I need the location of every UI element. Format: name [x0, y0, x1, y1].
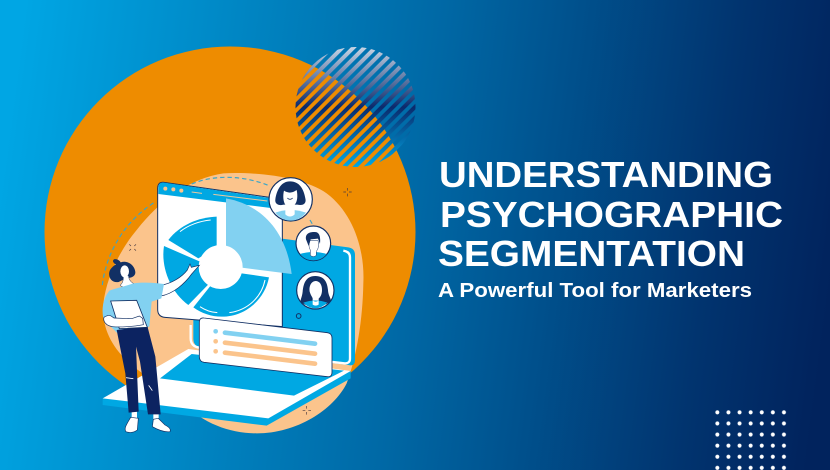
title: PSYCHOGRAPHIC	[440, 194, 783, 235]
title bar lines	[192, 192, 267, 201]
ankles	[132, 412, 159, 420]
trousers	[117, 326, 161, 414]
dot grid	[712, 407, 790, 470]
orange circle	[44, 46, 416, 418]
neck	[120, 275, 135, 287]
laptop screen	[191, 238, 355, 365]
peach blob	[103, 173, 363, 433]
hair	[109, 259, 135, 282]
light blue pie wedge	[226, 198, 292, 274]
sparkle icons	[129, 188, 352, 415]
card bullets	[213, 329, 218, 354]
subtitle: A Powerful Tool for Marketers	[438, 280, 752, 302]
right shoe	[152, 418, 170, 432]
donut segments	[163, 217, 269, 317]
shirt	[103, 283, 164, 333]
trouser highlights	[126, 378, 152, 391]
info card	[199, 318, 332, 377]
title: UNDERSTANDING	[439, 154, 773, 195]
title: SEGMENTATION	[438, 233, 745, 274]
avatar: woman with long hair	[297, 272, 334, 309]
illustration: analyst with laptop and dashboard	[102, 173, 363, 433]
face	[120, 265, 129, 277]
status ring	[296, 314, 301, 318]
window buttons	[163, 187, 183, 193]
avatar: woman with bob hair	[269, 178, 312, 221]
keyboard area	[160, 354, 344, 396]
title bar	[158, 183, 282, 209]
donut highlight lines	[180, 220, 265, 313]
striped gradient circle	[296, 47, 416, 167]
donut hub	[199, 245, 243, 289]
left shoe	[125, 417, 138, 433]
person presenting	[103, 259, 199, 433]
dashed connector arcs	[102, 177, 312, 285]
forearm holding clipboard	[104, 315, 143, 327]
laptop base	[103, 349, 351, 426]
title	[438, 154, 783, 274]
pointing arm	[161, 264, 199, 296]
avatar: man with short hair	[296, 226, 331, 261]
dashboard window	[158, 182, 292, 327]
card bars	[225, 333, 315, 364]
clipboard	[111, 300, 147, 329]
